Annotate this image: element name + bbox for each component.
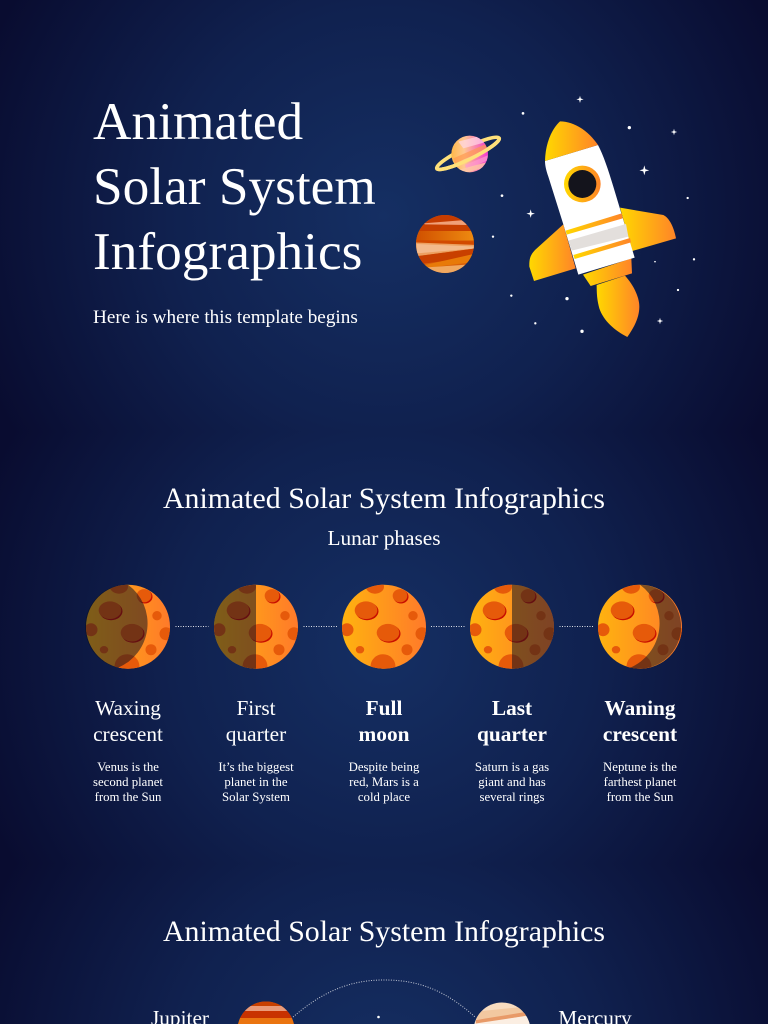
label: Full bbox=[366, 696, 402, 720]
label: First bbox=[236, 696, 276, 720]
dotted connectors bbox=[176, 626, 593, 628]
section 2 subtitle: Lunar phases bbox=[327, 526, 441, 550]
center dot bbox=[377, 1016, 380, 1018]
phase: waning crescent bbox=[596, 580, 684, 804]
label: moon bbox=[359, 722, 410, 746]
label: crescent bbox=[603, 722, 678, 746]
description: farthest planet bbox=[604, 775, 677, 789]
description: Venus is the bbox=[97, 760, 159, 774]
moon icon bbox=[212, 580, 300, 679]
stars bbox=[492, 96, 695, 333]
rocket body bbox=[545, 145, 635, 275]
illustration: space scene bbox=[413, 96, 695, 337]
moon icon bbox=[596, 580, 684, 679]
subtitle: Here is where this template begins bbox=[93, 307, 358, 328]
moon icon bbox=[84, 580, 172, 679]
title: Infographics bbox=[93, 222, 362, 281]
label: Waning bbox=[604, 696, 676, 720]
description: Despite being bbox=[349, 760, 420, 774]
section 2 heading: Animated Solar System Infographics bbox=[163, 482, 605, 515]
phase: first quarter bbox=[212, 580, 300, 804]
description: several rings bbox=[479, 790, 545, 804]
description: It’s the biggest bbox=[218, 760, 294, 774]
label: Waxing bbox=[95, 696, 161, 720]
label: quarter bbox=[477, 722, 547, 746]
rocket window bbox=[564, 166, 601, 202]
rocket flame bbox=[597, 276, 639, 337]
icon: rocket bbox=[529, 121, 676, 337]
description: Neptune is the bbox=[603, 760, 677, 774]
icon: Mercury bbox=[472, 1002, 532, 1024]
phase: last quarter bbox=[468, 580, 556, 804]
icon: Jupiter bbox=[238, 1002, 294, 1024]
rocket fins bbox=[529, 208, 676, 281]
icon: striped planet bbox=[416, 215, 474, 273]
description: Solar System bbox=[222, 790, 290, 804]
moon icon bbox=[468, 580, 556, 679]
rocket base bbox=[583, 258, 632, 286]
phase: waxing crescent bbox=[84, 580, 172, 804]
moon icon bbox=[340, 580, 428, 679]
section 3 heading: Animated Solar System Infographics bbox=[163, 915, 605, 948]
description: giant and has bbox=[478, 775, 546, 789]
description: Saturn is a gas bbox=[475, 760, 549, 774]
label: crescent bbox=[93, 722, 163, 746]
rocket nose bbox=[545, 121, 598, 161]
label: quarter bbox=[226, 722, 286, 746]
title: Animated bbox=[93, 92, 303, 151]
title: Solar System bbox=[93, 157, 376, 216]
rocket stripes bbox=[566, 213, 631, 259]
description: from the Sun bbox=[607, 790, 674, 804]
phase: full moon bbox=[340, 580, 428, 804]
description: red, Mars is a bbox=[349, 775, 419, 789]
description: cold place bbox=[358, 790, 410, 804]
label: Last bbox=[492, 696, 533, 720]
description: second planet bbox=[93, 775, 163, 789]
icon: ringed planet bbox=[434, 136, 502, 172]
description: from the Sun bbox=[95, 790, 162, 804]
orbit arc bbox=[293, 980, 475, 1017]
description: planet in the bbox=[224, 775, 288, 789]
